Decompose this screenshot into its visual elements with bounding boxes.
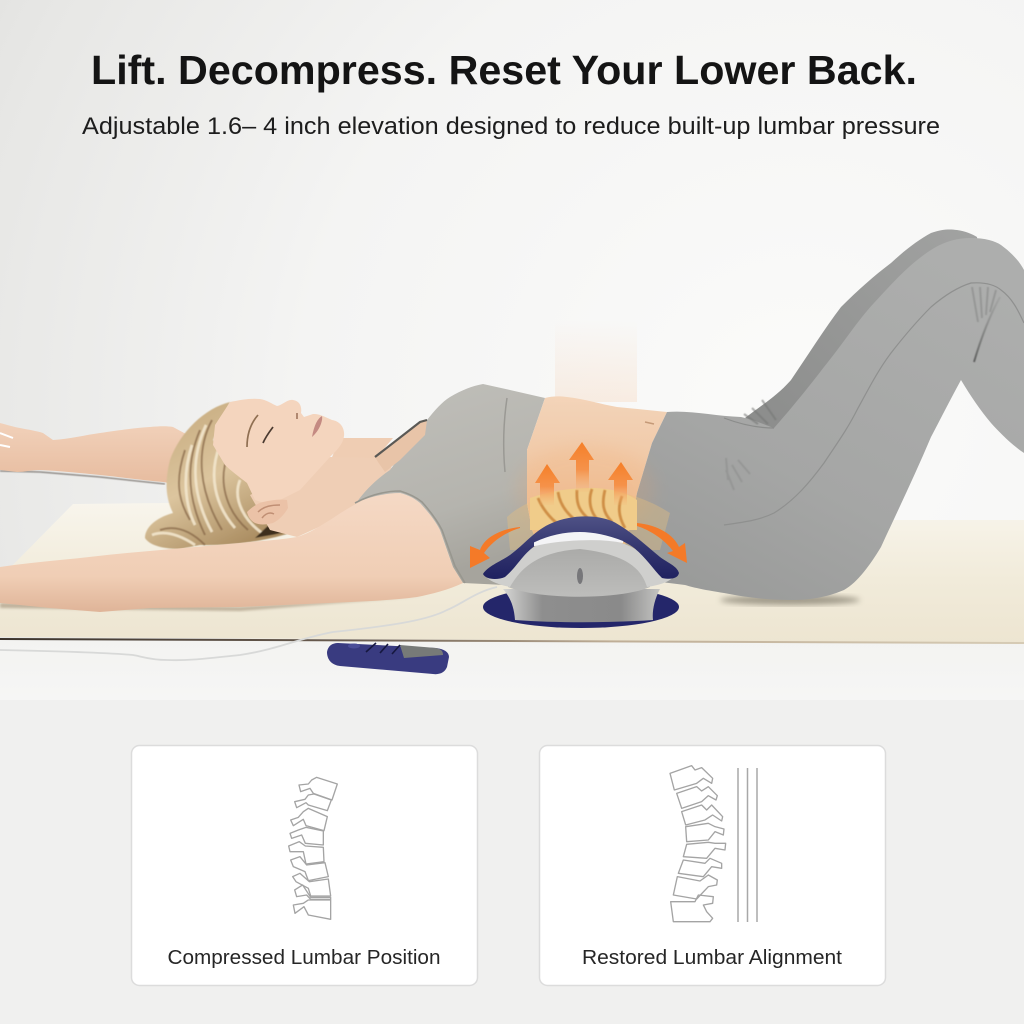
hand fingers: [0, 433, 13, 447]
lower section background: [0, 700, 1024, 1024]
remote screen: [400, 645, 443, 658]
device stand: [503, 589, 660, 622]
device dome: [508, 545, 650, 597]
midriff: [527, 396, 667, 550]
up arrows: [535, 442, 633, 505]
subtitle: Adjustable 1.6– 4 inch elevation designed to reduce built-up lumbar pressure: [82, 113, 940, 140]
scene: woman lying on device: [0, 229, 1024, 612]
armhole: [375, 420, 427, 472]
device: [483, 516, 679, 628]
closed eye: [263, 427, 273, 443]
glowing vertebrae: [507, 488, 670, 550]
alignment lines: [738, 768, 757, 922]
device cap: [483, 516, 679, 579]
hip gathers: [726, 458, 750, 490]
near arm and chest: [0, 493, 463, 612]
panel: compressed lumbar position: [132, 746, 478, 986]
eyebrow: [247, 415, 258, 447]
curved arrow right: [637, 523, 687, 563]
device light strip: [535, 533, 623, 545]
waist gathers: [744, 400, 776, 424]
knee pit crease: [974, 297, 1000, 362]
far shoulder behind chin: [330, 438, 393, 462]
remote buttons: [366, 643, 400, 654]
shadows on mat and floor: [0, 471, 860, 611]
label: compressed: Compressed Lumbar Position: [168, 947, 440, 969]
device base: [483, 586, 679, 628]
lips: [312, 416, 322, 437]
yoga mat: [0, 503, 1024, 643]
leggings: [625, 238, 1024, 600]
waist band seam: [724, 418, 774, 428]
silver arch: [487, 537, 677, 587]
far arm: [0, 423, 186, 484]
face: [213, 399, 344, 505]
backdrop: studio wall and floor: [0, 0, 1024, 700]
far leg: [745, 229, 985, 450]
sports top: [355, 384, 545, 585]
remote control: [327, 643, 449, 674]
device slot: [577, 568, 583, 584]
title: Lift. Decompress. Reset Your Lower Back.: [91, 47, 917, 93]
curved arrow left: [470, 527, 520, 568]
heat glow above lumbar: [515, 320, 655, 535]
ear: [247, 500, 288, 524]
spine: compressed: [289, 777, 337, 919]
knee gathers: [972, 287, 996, 322]
label: restored: Restored Lumbar Alignment: [582, 947, 842, 969]
navel: [645, 422, 654, 424]
neck and chest: [250, 457, 395, 537]
hair: [145, 402, 320, 549]
spine: restored: [670, 766, 726, 922]
power cable: [0, 587, 497, 660]
nostril: [296, 413, 298, 419]
panel: restored lumbar alignment: [540, 746, 886, 986]
leggings seam: [724, 283, 1024, 525]
